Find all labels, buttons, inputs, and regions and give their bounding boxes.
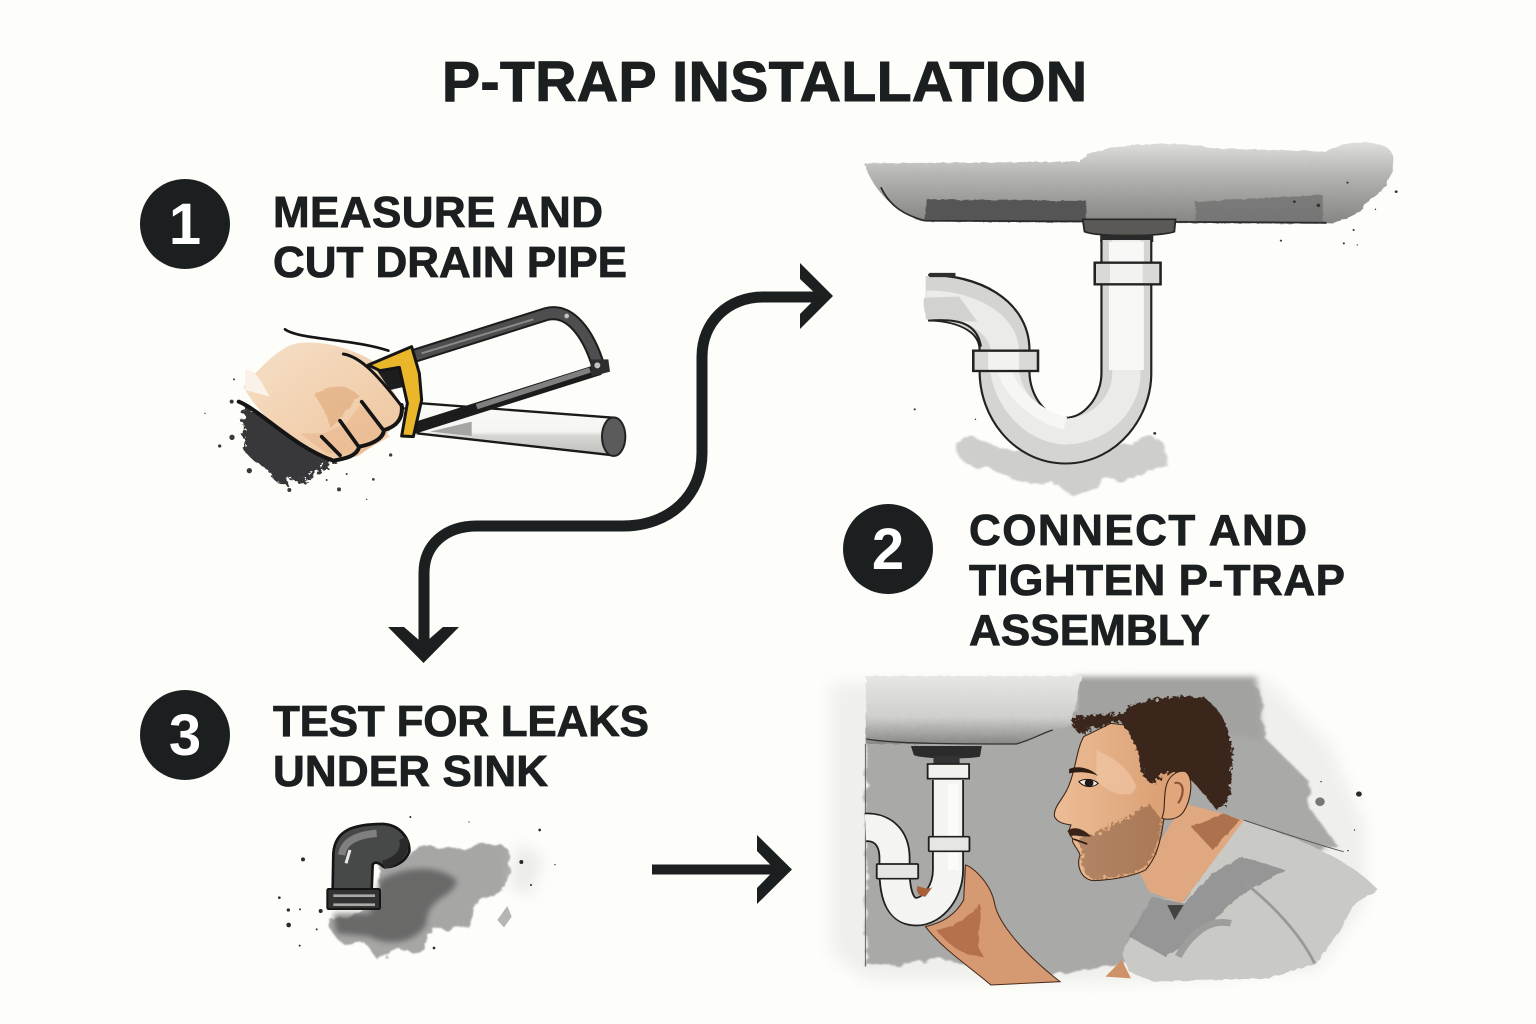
neck [1140, 803, 1244, 903]
step 1 label: MEASURE AND [273, 188, 603, 237]
number badge 2 [843, 504, 933, 594]
elbow collar [327, 889, 380, 909]
ear [1162, 771, 1191, 819]
arrowhead right [800, 263, 833, 329]
paint specks [1315, 781, 1362, 851]
step 3 label: TEST FOR LEAKS [273, 697, 649, 746]
cut pipe [417, 403, 625, 456]
man's arm and hand [925, 865, 1060, 985]
number badge 1 [140, 179, 230, 269]
step 2 label [969, 506, 1345, 655]
hacksaw frame [400, 313, 610, 428]
illustration: leaking elbow pipe with water stain [278, 816, 556, 960]
ink splash [204, 378, 392, 500]
sink underside [865, 676, 1262, 967]
arrow from step 3 to inspection scene [652, 835, 792, 904]
cabinet wall [866, 687, 1338, 977]
wrist of other arm [1105, 960, 1131, 978]
step 1 label [273, 188, 627, 287]
step 3 heading [140, 690, 649, 796]
illustration: sink and P-trap [865, 142, 1398, 494]
shirt [1122, 820, 1378, 982]
eye and brow [1069, 767, 1098, 776]
number badge 3 [140, 690, 230, 780]
step 3 label: UNDER SINK [273, 747, 548, 796]
head [1054, 696, 1244, 903]
illustration: man inspecting P-trap under sink [831, 676, 1378, 985]
drain flange [1083, 219, 1175, 242]
lower slip nut [973, 351, 1038, 371]
step 1 label: CUT DRAIN PIPE [273, 238, 627, 287]
saw handle grip [377, 368, 405, 390]
number badge 1: 1 [169, 192, 201, 257]
flange and slip nuts [877, 746, 982, 879]
sink basin [865, 142, 1398, 435]
step 3 label [273, 697, 649, 796]
yellow saw handle [368, 347, 422, 437]
upper slip nut [1095, 263, 1161, 284]
step 1 heading [140, 179, 627, 287]
step 2 heading [843, 504, 1345, 655]
arrowhead down [388, 627, 459, 663]
step 2 label: ASSEMBLY [969, 606, 1210, 655]
number badge 3: 3 [169, 703, 201, 768]
elbow pipe [333, 824, 409, 890]
step 2 label: TIGHTEN P-TRAP [969, 556, 1345, 605]
water stain [330, 843, 543, 960]
face [1054, 723, 1187, 881]
illustration: hand cutting pipe with hacksaw [204, 313, 625, 500]
number badge 2: 2 [872, 517, 904, 582]
shadow wash under trap [957, 437, 1167, 494]
flow arrow from step 1 to sink and down to step 3 [388, 263, 833, 663]
arrowhead [757, 835, 792, 904]
white drain pipe [865, 780, 953, 912]
title: P-TRAP INSTALLATION [442, 50, 1087, 114]
splatter dots [278, 816, 556, 949]
beard stubble [1078, 803, 1162, 878]
pale wash backdrop [831, 680, 1365, 983]
hair [1073, 696, 1232, 810]
hand [239, 329, 403, 461]
step 2 label: CONNECT AND [969, 506, 1307, 555]
J-bend pipe [897, 240, 1126, 441]
